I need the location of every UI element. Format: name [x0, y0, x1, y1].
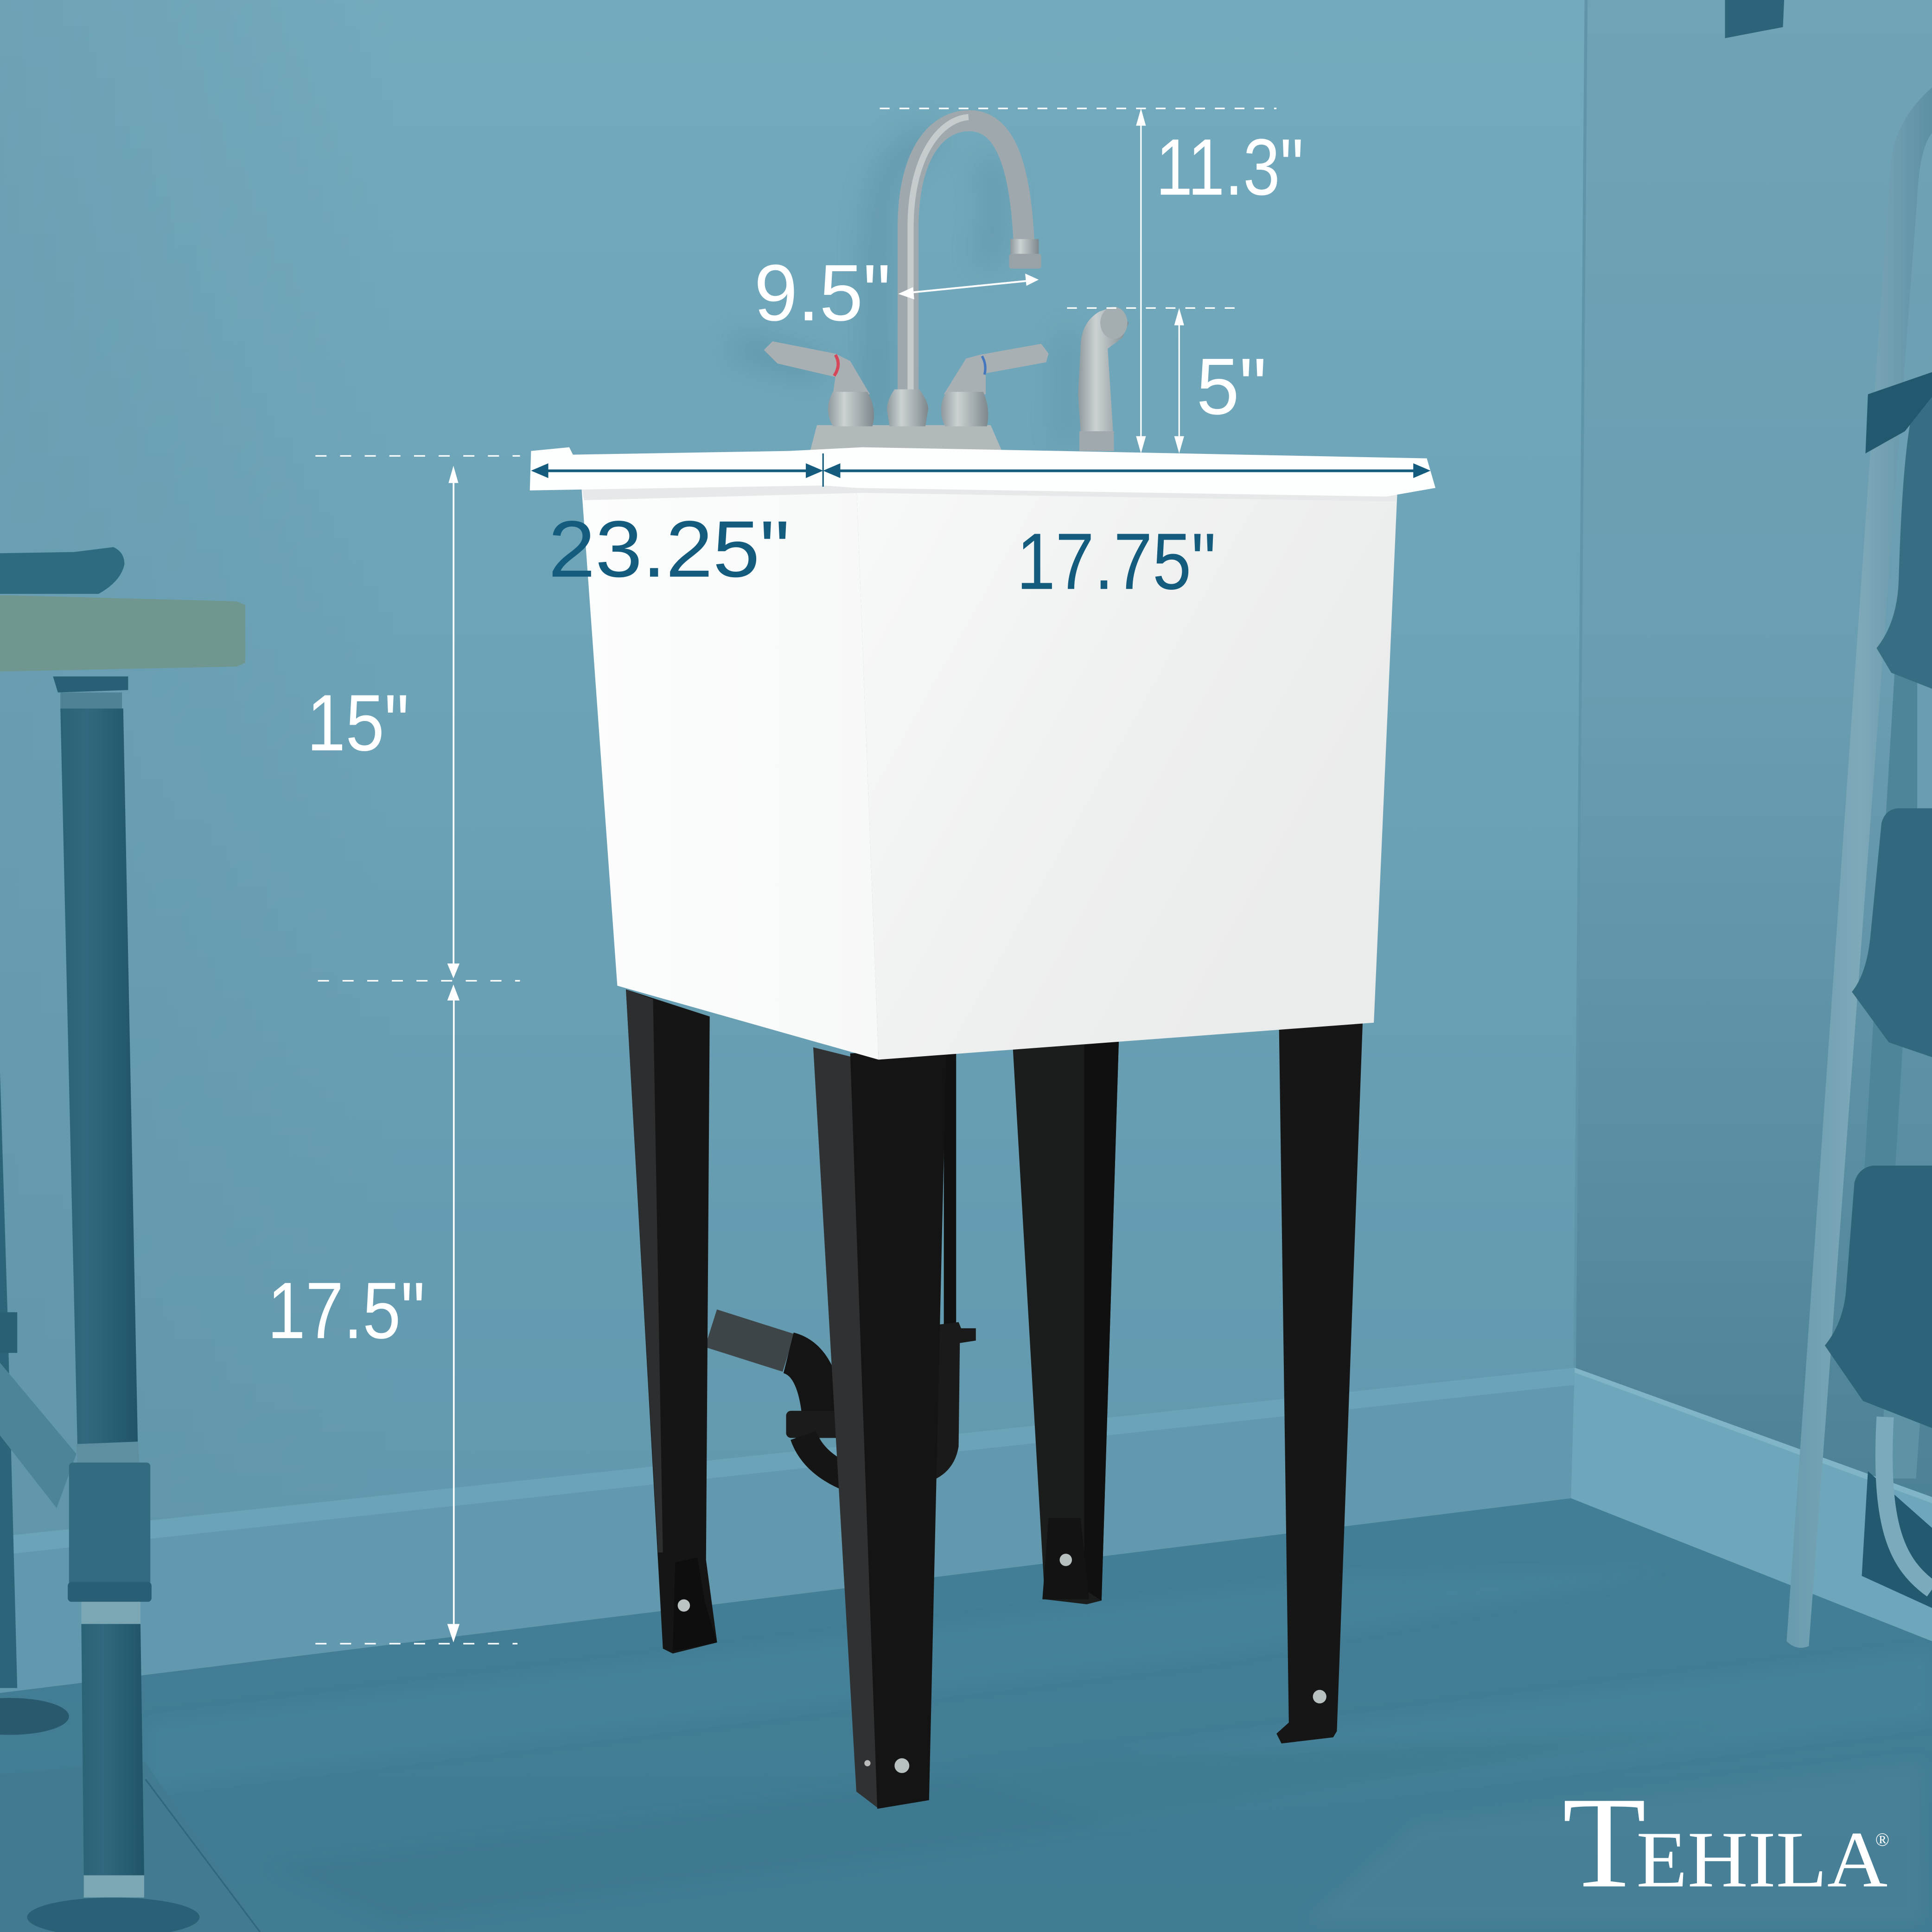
ladder: back rails: [1861, 665, 1932, 1479]
faucet: deck plate: [810, 425, 1003, 453]
ladder: wall bracket: [1725, 0, 1784, 38]
leg: front: [813, 1047, 946, 1809]
arrow: 9.5 in: [898, 274, 1039, 300]
dimension dashes: height: [315, 456, 520, 1644]
arrow: 15 in: [447, 466, 459, 978]
sink rim: [530, 447, 1435, 497]
label: 9.5 in: 9.5": [754, 248, 891, 338]
logo: Tehila: EHILA: [1636, 1816, 1887, 1904]
ladder: step one: [1876, 397, 1932, 689]
arrow: 5 in: [1174, 308, 1184, 453]
dimension dashes: faucet: [880, 108, 1276, 308]
leg: right: [1276, 1020, 1363, 1743]
leg: back left: [626, 989, 717, 1653]
baseboard: left: [0, 1368, 1575, 1693]
ladder: clamp: [1865, 372, 1932, 453]
logo: Tehila: ®: [1875, 1829, 1889, 1850]
label: 17.75 in: 17.75": [1016, 516, 1216, 606]
logo: Tehila: [1562, 1770, 1889, 1915]
drain trap: [711, 1047, 976, 1479]
stool: wooden top: [0, 595, 245, 671]
background: right wall: [1575, 0, 1932, 1528]
arrow: 17.5 in: [447, 984, 459, 1642]
floor: [0, 1498, 1932, 1932]
faucet wall shadow: [733, 141, 1074, 444]
faucet: hot handle: [764, 341, 874, 427]
ladder: front rail: [1786, 88, 1932, 1648]
leg: back right: [1013, 1041, 1119, 1604]
ladder: step three: [1825, 1166, 1932, 1428]
faucet: cold handle: [941, 344, 1049, 427]
ladder: step two: [1852, 808, 1932, 1057]
sink: right face: [856, 483, 1397, 1059]
label: 23.25 in: 23.25": [548, 504, 790, 594]
stool: front pipe: [27, 676, 200, 1932]
stool: back left pipe and brace: [0, 1072, 77, 1735]
baseboard: right: [1571, 1368, 1932, 1641]
background: left wall: [0, 0, 1589, 1725]
label: 5 in: 5": [1196, 342, 1267, 431]
label: 11.3 in: 11.3": [1156, 122, 1304, 212]
arrow: 11.3 in: [1136, 108, 1146, 453]
ladder: base block: [1862, 1417, 1932, 1608]
logo: Tehila: T: [1562, 1770, 1646, 1915]
arrows: tub width and depth: [531, 453, 1430, 487]
sink tub: [581, 480, 1397, 1059]
label: 17.5 in: 17.5": [268, 1266, 425, 1355]
stool: cloth on top: [0, 547, 124, 594]
faucet: base collar: [887, 389, 928, 427]
faucet: spout: [908, 117, 1041, 397]
sink: left face: [581, 483, 879, 1059]
sink: rim shadow: [581, 480, 1397, 502]
label: 15 in: 15": [307, 678, 409, 767]
faucet: side sprayer: [1078, 307, 1129, 451]
wall corner line: [1574, 0, 1588, 1370]
